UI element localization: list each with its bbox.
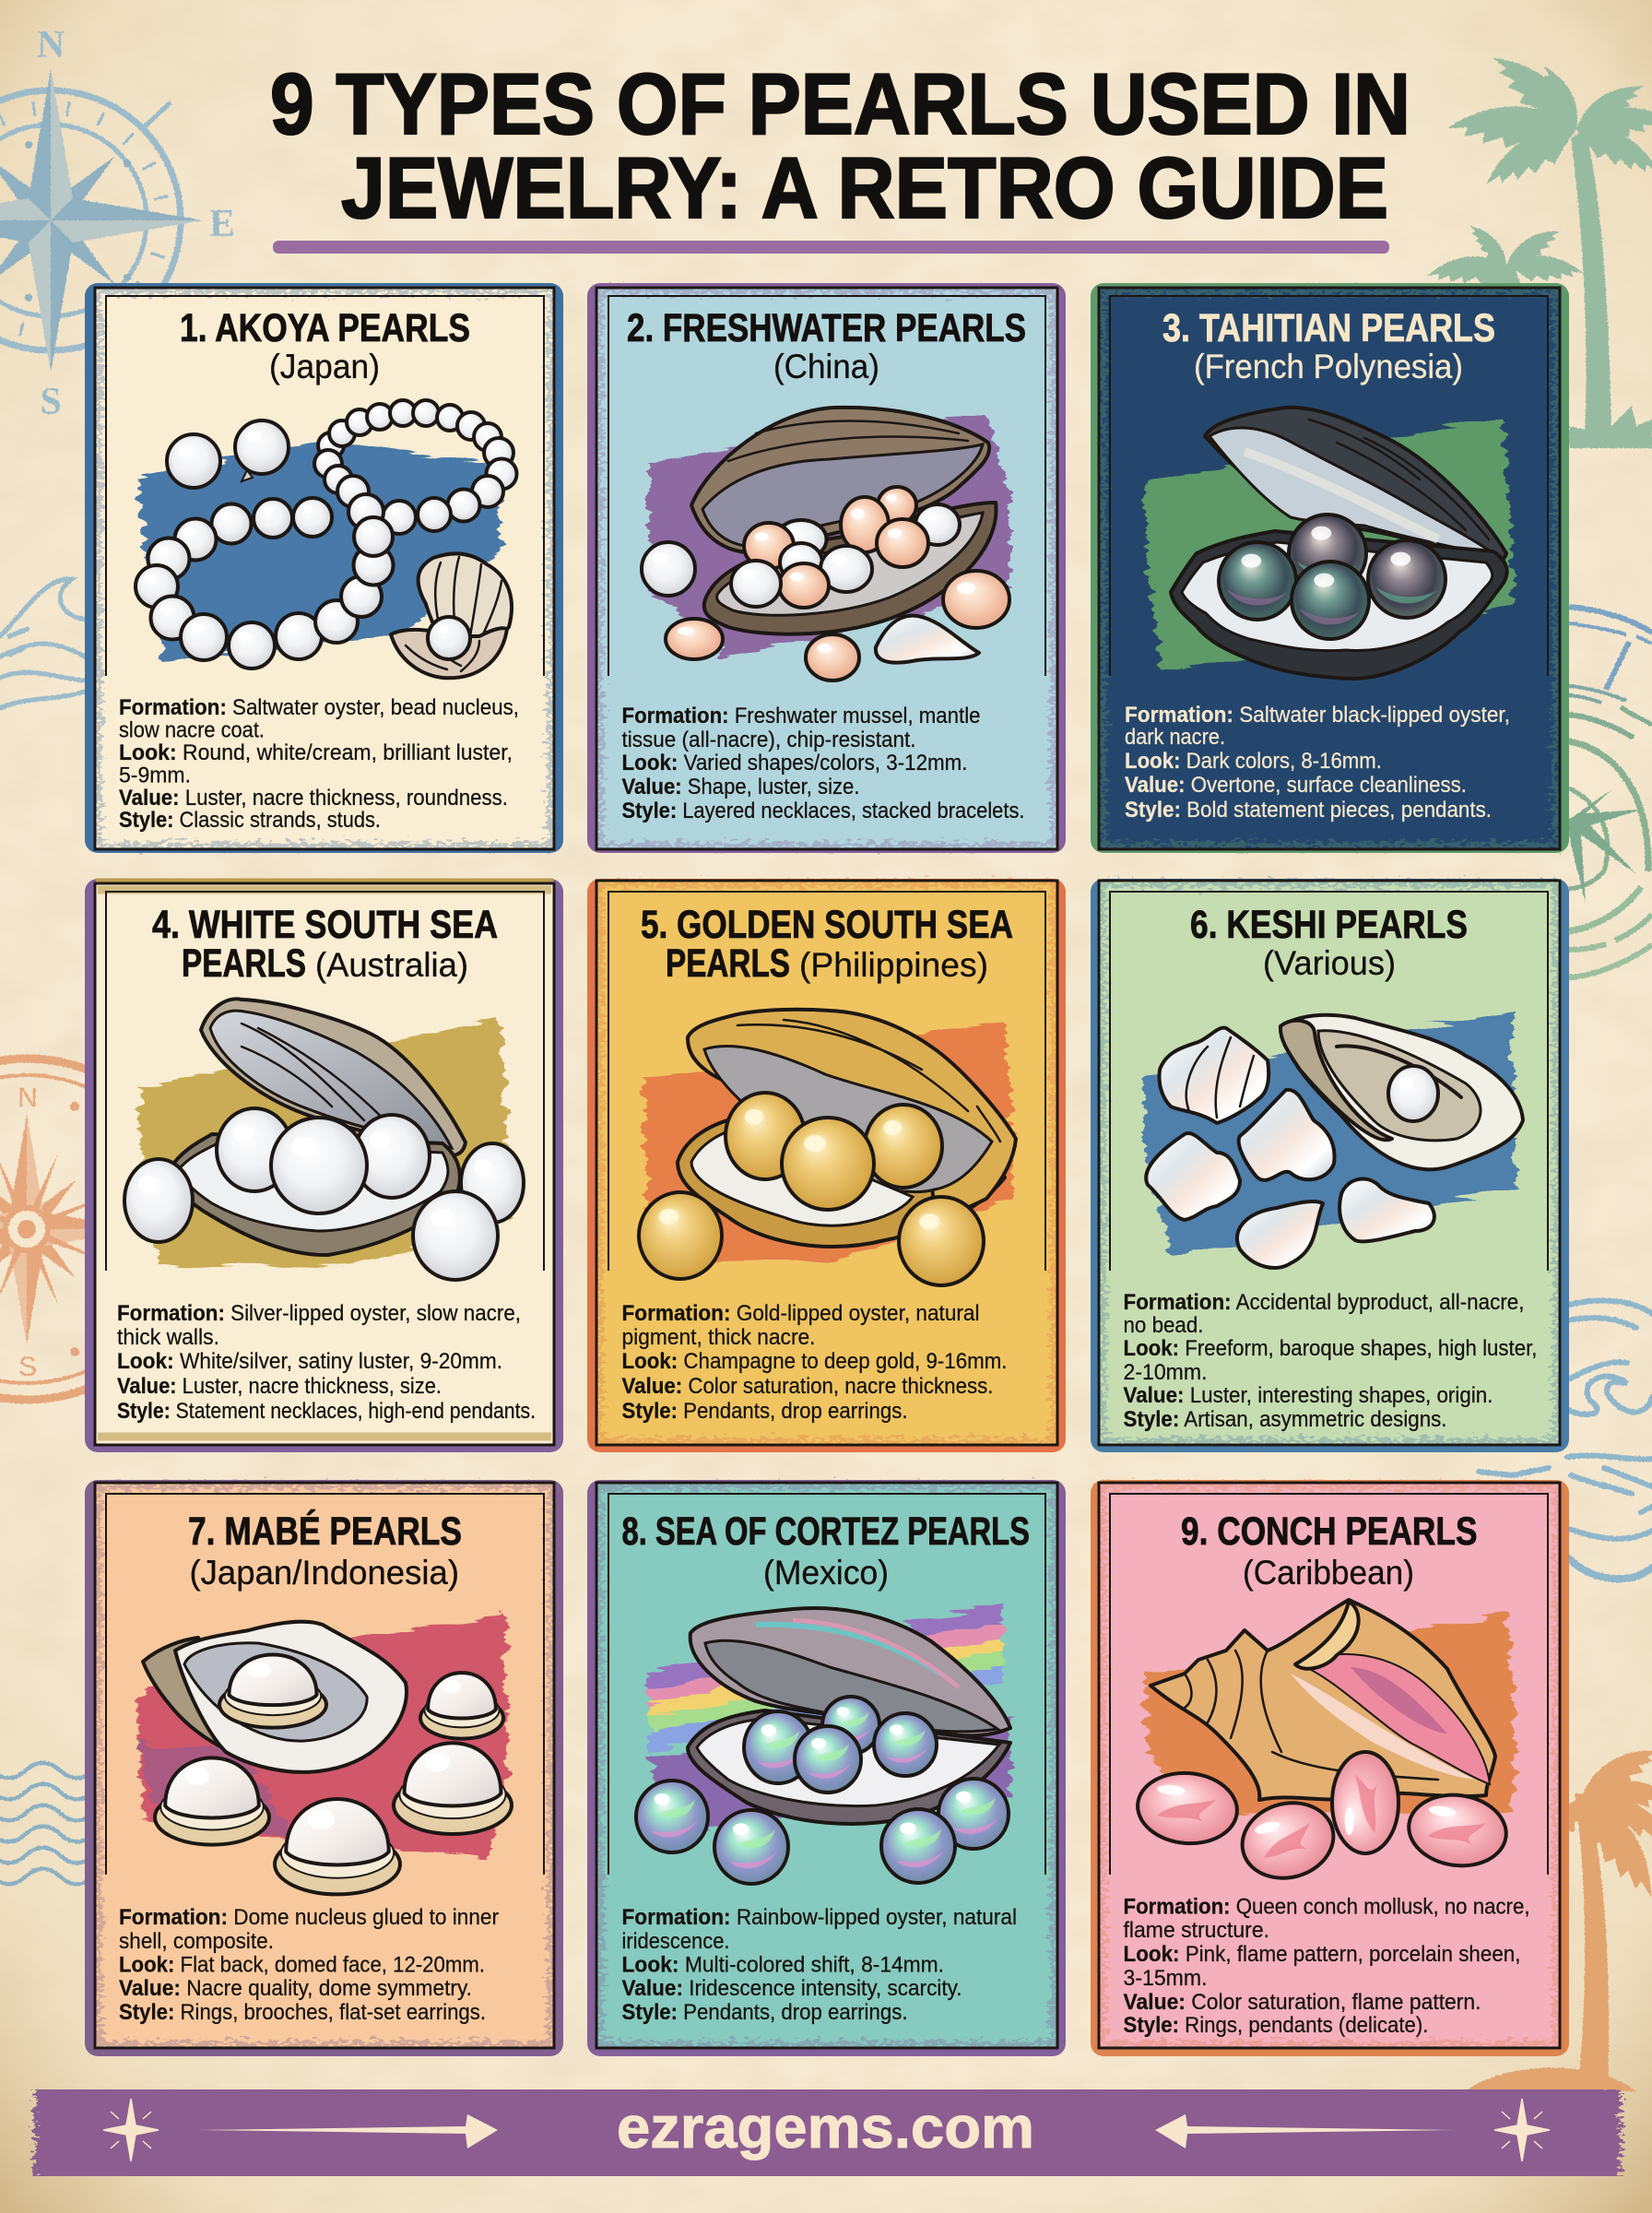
heading: golden south sea: (Philippines): [799, 946, 988, 984]
heading: conch: 9. CONCH PEARLS: [1181, 1509, 1477, 1554]
text block: cortez: Style: Pendants, drop earrings.: [621, 2000, 907, 2025]
decoration: blue wavy lines left: [0, 1763, 94, 1884]
text block: keshi: Style: Artisan, asymmetric designs.: [1123, 1407, 1447, 1432]
heading: conch: [1181, 1509, 1477, 1592]
panel: 2 freshwater pearls: [587, 283, 1066, 853]
text block: white south sea: Look: White/silver, satiny luster, 9-20mm.: [117, 1349, 502, 1374]
text block: white south sea: [117, 1301, 536, 1424]
text block: cortez: Value: Iridescence intensity, scarcity.: [621, 1976, 962, 2001]
heading: white south sea: [152, 903, 498, 986]
illustration: tahitian oyster: [1144, 408, 1512, 679]
heading: sea of cortez: 8. SEA OF CORTEZ PEARLS: [621, 1509, 1030, 1554]
text block: tahitian: [1125, 703, 1510, 822]
text block: tahitian: dark nacre.: [1125, 725, 1225, 750]
text block: tahitian: Style: Bold statement pieces, pendants.: [1125, 798, 1492, 822]
heading: mabe: 7. MABÉ PEARLS: [188, 1509, 462, 1554]
text block: tahitian: Value: Overtone, surface cleanliness.: [1125, 773, 1467, 798]
text block: keshi: no bead.: [1123, 1313, 1204, 1338]
text block: tahitian: Formation: Saltwater black-lipped oyster,: [1125, 703, 1510, 728]
text block: akoya: Value: Luster, nacre thickness, roundness.: [119, 786, 508, 811]
text block: freshwater: Value: Shape, luster, size.: [621, 775, 859, 799]
arrow: left arrow: [198, 2114, 498, 2148]
text block: conch: Formation: Queen conch mollusk, no nacre,: [1123, 1894, 1530, 1920]
panel: 8 sea of cortez pearls: [587, 1480, 1066, 2056]
decoration: blue waves right: [1479, 1301, 1652, 1579]
text block: conch: [1123, 1894, 1530, 2038]
heading: tahitian: 3. TAHITIAN PEARLS: [1162, 306, 1495, 350]
text block: conch: Look: Pink, flame pattern, porcelain sheen,: [1123, 1942, 1521, 1967]
text block: akoya: Style: Classic strands, studs.: [119, 808, 381, 833]
text block: golden south sea: pigment, thick nacre.: [621, 1325, 815, 1350]
heading: akoya: [180, 306, 470, 385]
heading: sea of cortez: (Mexico): [763, 1554, 889, 1592]
website: ezragems.com: [617, 2094, 1034, 2160]
decoration: orange compass left: S: [18, 1352, 37, 1382]
text block: cortez: [621, 1905, 1017, 2025]
text block: cortez: Look: Multi-colored shift, 8-14mm.: [621, 1953, 944, 1977]
text block: akoya: Formation: Saltwater oyster, bead nucleus,: [119, 695, 519, 720]
decoration: compass right: [1567, 607, 1652, 977]
panel: 5 golden south sea pearls: [587, 879, 1066, 1452]
text block: white south sea: thick walls.: [117, 1325, 219, 1350]
text block: keshi: 2-10mm.: [1123, 1360, 1208, 1385]
panel: 4 white south sea pearls: [85, 879, 563, 1452]
title: JEWELRY: A RETRO GUIDE: [341, 139, 1388, 236]
heading: tahitian: [1162, 306, 1495, 385]
heading: tahitian: (French Polynesia): [1194, 348, 1463, 385]
decoration: blue compass top left: [0, 24, 235, 423]
text block: keshi: [1123, 1290, 1538, 1432]
illustration: golden oyster: [639, 1010, 1016, 1285]
icon: right sparkle: [1494, 2099, 1550, 2161]
text block: mabe: shell, composite.: [119, 1929, 274, 1954]
text block: keshi: Look: Freeform, baroque shapes, high luster,: [1123, 1336, 1538, 1361]
text block: akoya: slow nacre coat.: [119, 717, 265, 743]
illustration: keshi shapes and oyster: [1144, 1011, 1523, 1268]
text block: freshwater: [621, 704, 1025, 823]
text block: freshwater: Look: Varied shapes/colors, 3-12mm.: [621, 751, 968, 775]
heading: keshi: [1190, 903, 1468, 982]
heading: white south sea: PEARLS: [182, 941, 306, 986]
decoration: blue compass top left: S: [40, 381, 62, 423]
panel: 6 keshi pearls: [1091, 879, 1569, 1452]
panel: 7 mabe pearls: [85, 1480, 563, 2056]
heading: akoya: (Japan): [269, 348, 380, 385]
heading: freshwater: 2. FRESHWATER PEARLS: [627, 306, 1026, 350]
heading: mabe: [188, 1509, 462, 1592]
title underline: [273, 241, 1389, 254]
illustration: white south sea oyster: [124, 999, 524, 1280]
text block: mabe: Formation: Dome nucleus glued to inner: [119, 1905, 499, 1930]
text block: golden south sea: Value: Color saturation, nacre thickness.: [621, 1374, 994, 1399]
illustration: mabe domes and oyster: [136, 1614, 512, 1894]
text block: conch: Value: Color saturation, flame pattern.: [1123, 1990, 1481, 2015]
text block: cortez: Formation: Rainbow-lipped oyster, natural: [621, 1905, 1017, 1930]
decoration: orange compass left: [0, 1059, 197, 1400]
decoration: orange palm bottom right: [1466, 1738, 1652, 2091]
illustration: freshwater mussel: [642, 408, 1010, 680]
panel: 1 akoya pearls: [85, 283, 563, 853]
text block: white south sea: Formation: Silver-lipped oyster, slow nacre,: [117, 1301, 521, 1326]
icon: left sparkle: [103, 2099, 159, 2161]
text block: mabe: Look: Flat back, domed face, 12-20mm.: [119, 1953, 485, 1977]
text block: conch: 3-15mm.: [1123, 1966, 1208, 1991]
text block: golden south sea: Look: Champagne to deep gold, 9-16mm.: [621, 1349, 1007, 1374]
text block: mabe: [119, 1905, 499, 2025]
text block: golden south sea: Style: Pendants, drop earrings.: [621, 1399, 907, 1424]
text block: freshwater: tissue (all-nacre), chip-resistant.: [621, 728, 916, 752]
text block: keshi: Value: Luster, interesting shapes, origin.: [1123, 1383, 1493, 1408]
text block: mabe: Value: Nacre quality, dome symmetry.: [119, 1976, 472, 2001]
heading: keshi: (Various): [1263, 944, 1396, 982]
heading: freshwater: [627, 306, 1026, 385]
text block: tahitian: Look: Dark colors, 8-16mm.: [1125, 749, 1382, 774]
heading: white south sea: 4. WHITE SOUTH SEA: [152, 903, 498, 947]
title: [270, 55, 1410, 236]
text block: conch: Style: Rings, pendants (delicate).: [1123, 2013, 1429, 2038]
text block: akoya: Look: Round, white/cream, brilliant luster,: [119, 740, 513, 765]
illustration: akoya strands and shell: [136, 400, 516, 678]
decoration: blue compass top left: N: [37, 24, 65, 66]
text block: white south sea: Style: Statement necklaces, high-end pendants.: [117, 1399, 536, 1424]
decoration: blue compass top left: E: [209, 203, 235, 245]
arrow: right arrow: [1155, 2114, 1454, 2148]
decoration: orange compass left: N: [18, 1083, 38, 1113]
text block: golden south sea: [621, 1301, 1007, 1424]
panel: 3 tahitian pearls: [1091, 283, 1569, 853]
text block: freshwater: Style: Layered necklaces, stacked bracelets.: [621, 799, 1025, 823]
heading: freshwater: (China): [773, 348, 879, 385]
heading: keshi: 6. KESHI PEARLS: [1190, 903, 1468, 947]
text block: white south sea: Value: Luster, nacre thickness, size.: [117, 1374, 442, 1399]
text block: freshwater: Formation: Freshwater mussel, mantle: [621, 704, 981, 728]
heading: white south sea: (Australia): [315, 946, 468, 984]
heading: sea of cortez: [621, 1509, 1030, 1592]
panel: 9 conch pearls: [1091, 1480, 1569, 2056]
footer band: [35, 2086, 1621, 2180]
heading: golden south sea: PEARLS: [666, 941, 790, 986]
text block: keshi: Formation: Accidental byproduct, all-nacre,: [1123, 1290, 1525, 1315]
illustration: cortez oyster: [636, 1606, 1010, 1884]
illustration: conch shell: [1135, 1600, 1516, 1888]
text block: mabe: Style: Rings, brooches, flat-set earrings.: [119, 2000, 486, 2025]
text block: golden south sea: Formation: Gold-lipped oyster, natural: [621, 1301, 979, 1326]
decoration: blue waves left: [0, 579, 85, 708]
text block: akoya: [119, 695, 519, 833]
heading: golden south sea: [641, 903, 1013, 986]
heading: golden south sea: 5. GOLDEN SOUTH SEA: [641, 903, 1013, 947]
heading: akoya: 1. AKOYA PEARLS: [180, 306, 470, 350]
decoration: green palm trees top right: [1425, 45, 1652, 448]
title: 9 TYPES OF PEARLS USED IN: [270, 55, 1410, 152]
text block: cortez: iridescence.: [621, 1929, 730, 1954]
heading: conch: (Caribbean): [1243, 1554, 1414, 1592]
heading: mabe: (Japan/Indonesia): [190, 1554, 459, 1592]
text block: akoya: 5-9mm.: [119, 763, 191, 787]
text block: conch: flame structure.: [1123, 1918, 1269, 1943]
